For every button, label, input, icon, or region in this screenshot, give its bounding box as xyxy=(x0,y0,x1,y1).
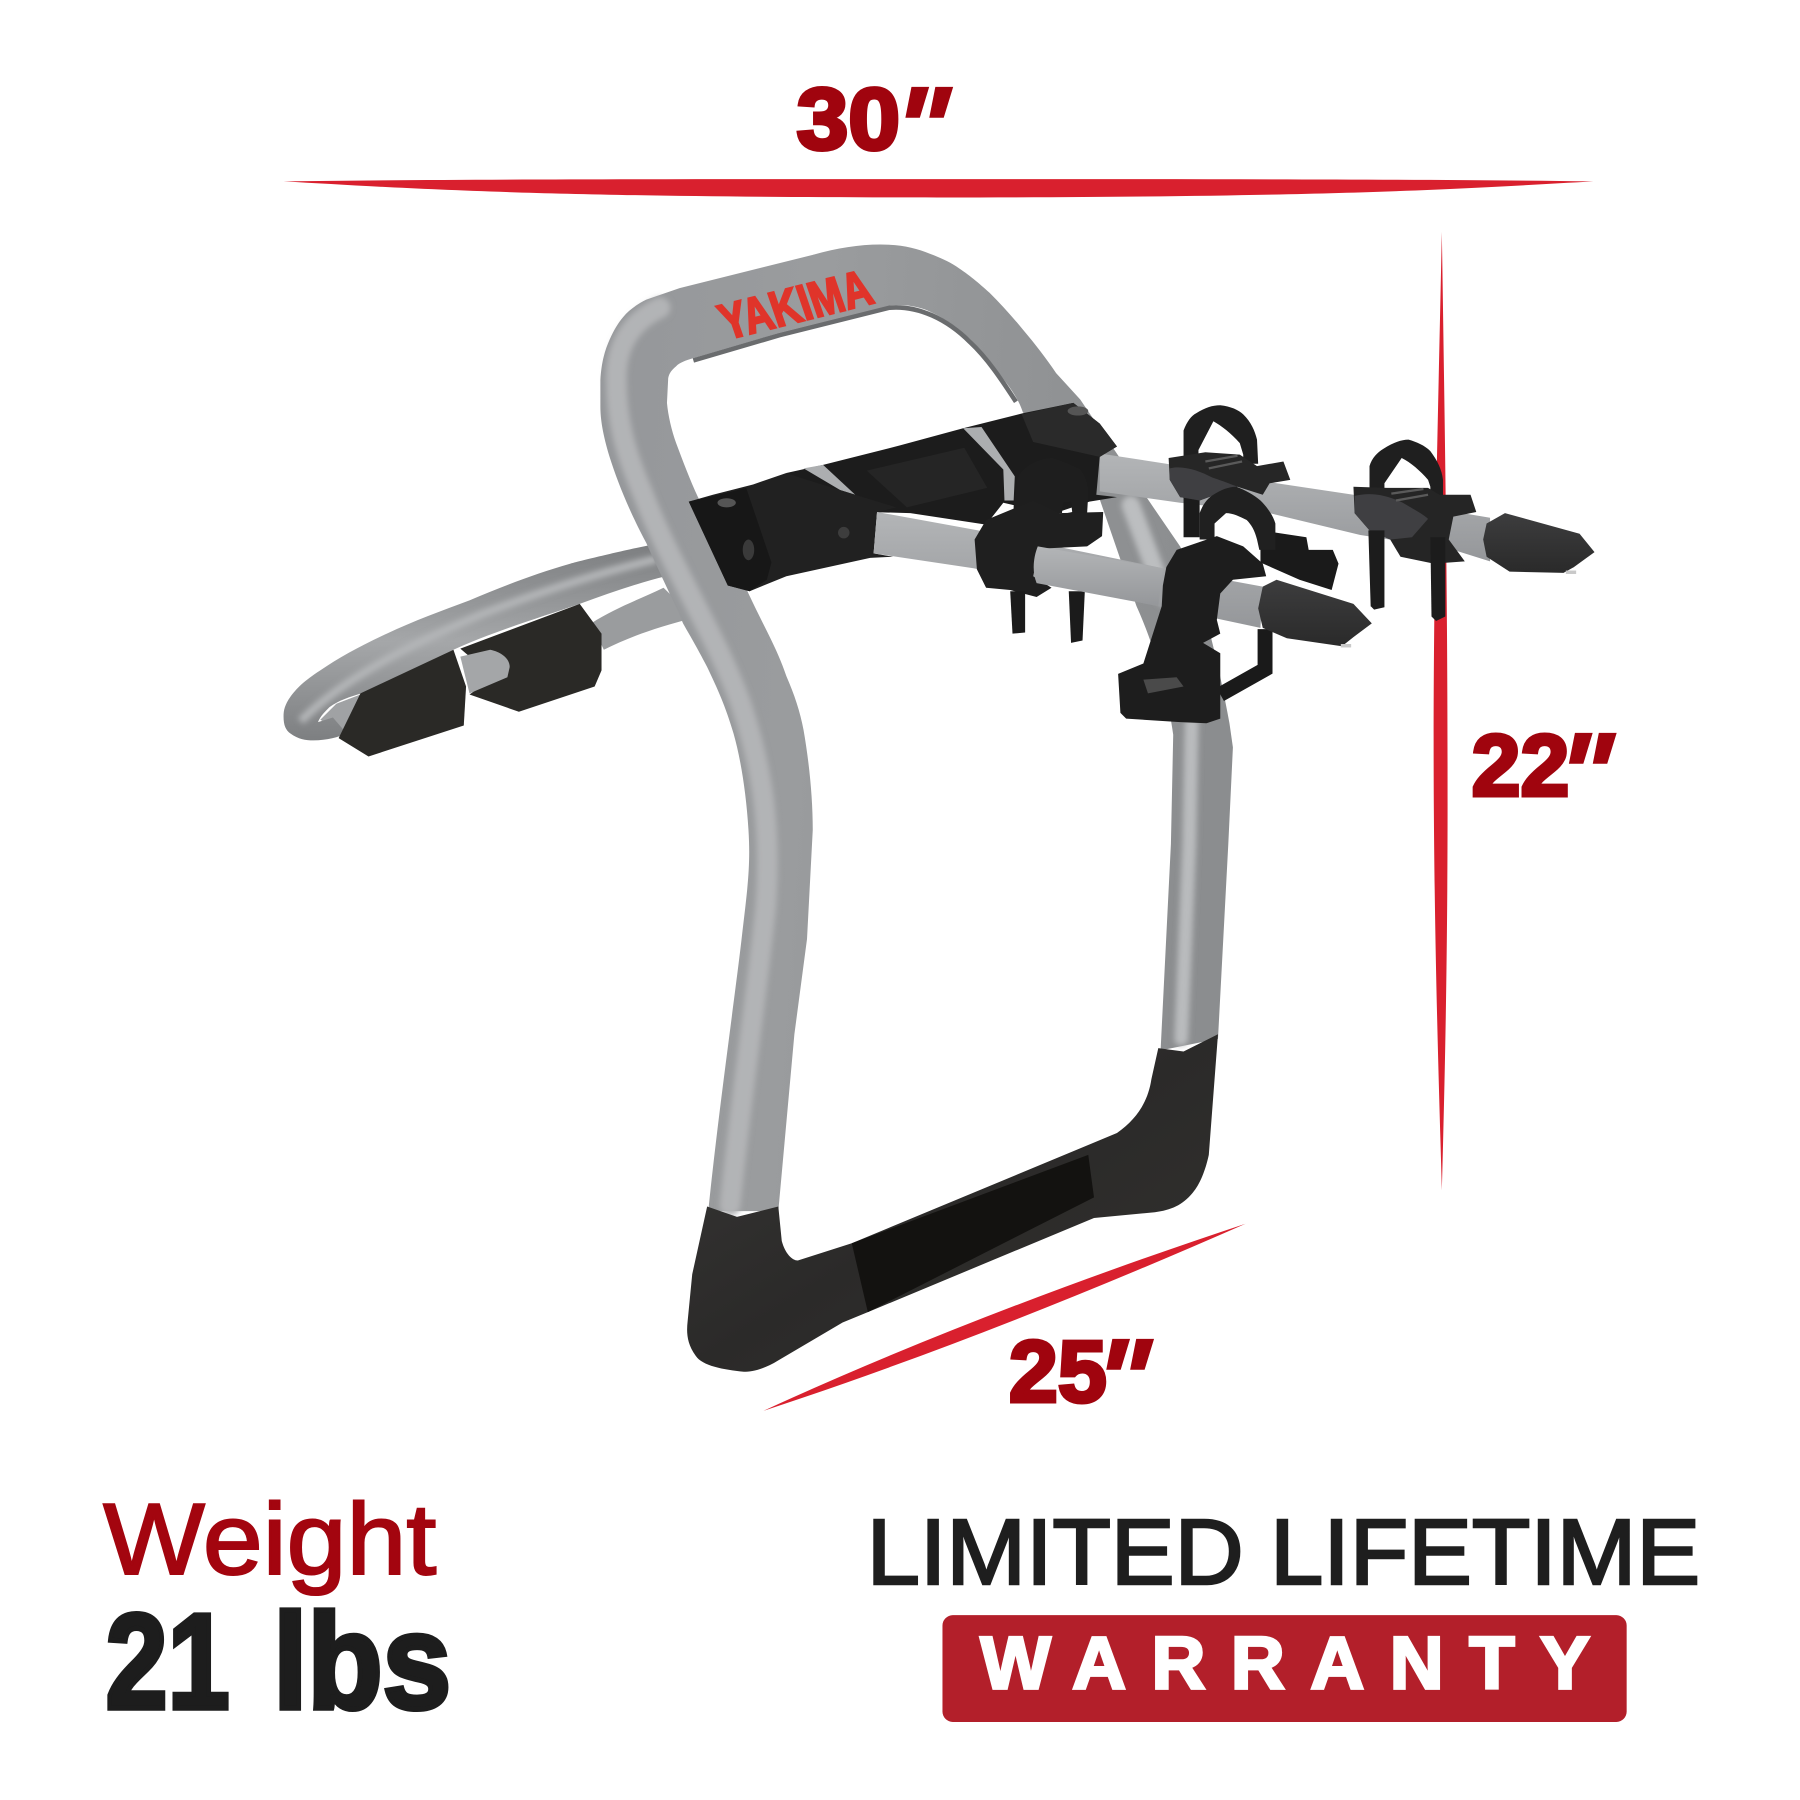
cap pins xyxy=(1341,571,1576,647)
front right cradle strap xyxy=(1200,487,1275,550)
Yakima logo: YAKIMA xyxy=(712,259,880,350)
rear right cradle strap xyxy=(1370,440,1443,497)
front tube segment past left cradle xyxy=(1034,546,1163,606)
dimension label: 22 inches: " xyxy=(1542,708,1629,837)
hub right block xyxy=(1022,403,1117,457)
rear left cradle ridges xyxy=(1205,456,1242,468)
frame shading xyxy=(616,308,1192,1205)
rear right cradle tails xyxy=(1368,530,1445,621)
hub strap bands xyxy=(804,465,855,495)
dimension line: width 30 inches xyxy=(284,179,1593,197)
foam pad rear xyxy=(460,604,602,712)
dimension line: depth 25 inches xyxy=(763,1224,1246,1411)
connector tube between foam pads xyxy=(460,650,510,693)
front right cradle and riser xyxy=(1118,536,1266,723)
rear left cradle tails xyxy=(1184,494,1200,537)
hub barrel xyxy=(786,403,1117,525)
front left cradle tails xyxy=(1010,591,1085,643)
warranty heading: LIMITED LIFETIME xyxy=(867,1500,1700,1604)
front left cradle strap xyxy=(1014,458,1088,514)
rear horizontal arm tube xyxy=(1100,453,1490,561)
rear hidden clip xyxy=(1260,530,1339,590)
front left cradle xyxy=(975,501,1103,597)
rack rear support arm xyxy=(284,543,695,740)
dimension label: 22 inches: 22 xyxy=(1472,718,1569,815)
foot ring highlight xyxy=(1143,677,1184,693)
dimension label: 30 inches: " xyxy=(879,63,966,192)
hub left block xyxy=(689,473,897,591)
weight value: lbs xyxy=(273,1585,451,1737)
dimension label: 30 inches xyxy=(797,63,966,192)
dimension label: 30 inches: 30 xyxy=(797,71,900,168)
rear right cradle xyxy=(1353,487,1476,564)
weight value: 21 xyxy=(106,1585,230,1737)
frame inner dark edge xyxy=(693,307,1016,402)
rear left cradle strap xyxy=(1184,405,1258,464)
weight label: Weight xyxy=(103,1484,436,1596)
dimension label: 25 inches: " xyxy=(1080,1314,1166,1443)
rear right cradle ridges xyxy=(1391,489,1428,501)
dimension line: height 22 inches xyxy=(1434,232,1448,1190)
product photo: Yakima bike rack xyxy=(284,245,1595,1372)
dimension label: 25 inches: 25 xyxy=(1009,1324,1107,1421)
warranty badge: WARRANTY xyxy=(980,1621,1590,1705)
dimension label: 22 inches xyxy=(1472,708,1629,837)
front end cap xyxy=(1258,580,1372,646)
black foot guard xyxy=(687,1034,1218,1372)
central black hub xyxy=(689,403,1117,591)
rear end cap xyxy=(1483,513,1595,573)
main arched frame xyxy=(600,245,1233,1211)
dimension label: 25 inches xyxy=(1009,1314,1166,1443)
front horizontal arm tube xyxy=(874,512,1263,628)
rear left cradle xyxy=(1169,452,1290,501)
foot centre rubber pad xyxy=(852,1155,1094,1312)
front bracket strap xyxy=(1220,629,1265,695)
foam pad front xyxy=(339,650,466,757)
